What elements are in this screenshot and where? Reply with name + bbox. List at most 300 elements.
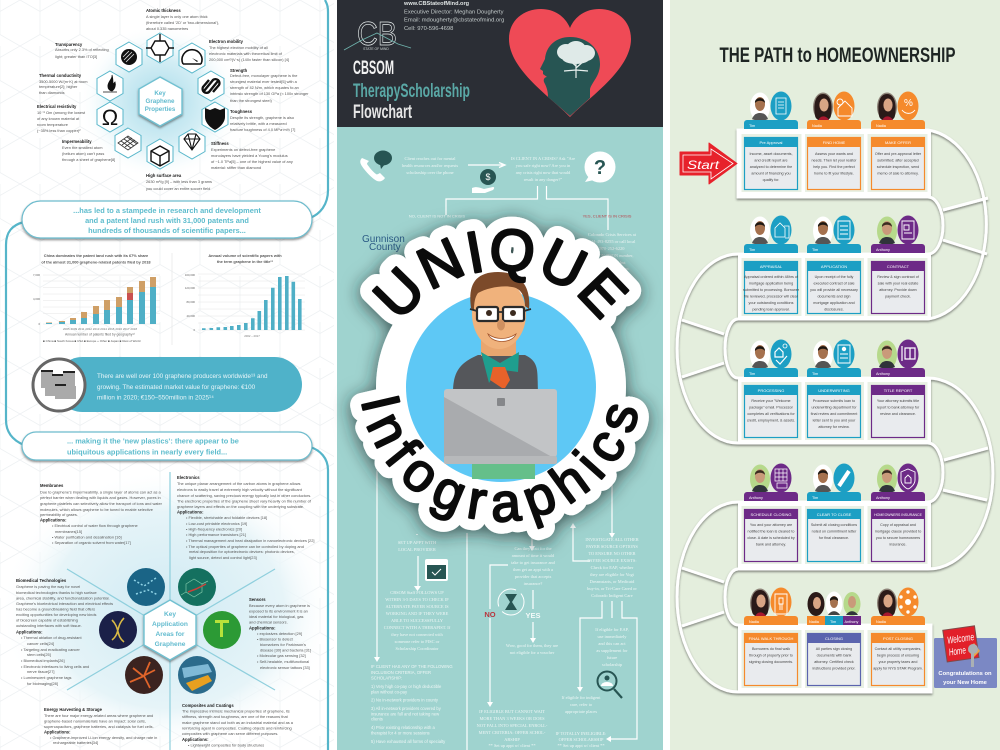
step: schedule closing: notified the loan is cleared to [748, 530, 794, 534]
step: make offer: submitted; after accepted [877, 158, 919, 162]
chart: annual scientific papers: 0 [193, 328, 195, 332]
text blocks: application areas: • Electrical control of water flow through graphene [52, 523, 138, 528]
step: title report: review and clearance. [880, 412, 916, 416]
step: pre approval: qualify for. [763, 178, 779, 182]
text: can they wait: then get an appt with a [513, 567, 553, 572]
text: is client in crisis: result in any danger?" [524, 177, 562, 182]
icon: question bubble: ? [594, 157, 606, 179]
text: criteria list: INCLUSION CRITERIA, OFFER [371, 670, 431, 675]
icon: start arrow: Start [687, 158, 720, 172]
chart: annual scientific papers: 160,000 [185, 273, 195, 277]
text blocks: graphene properties: Toughness [230, 109, 253, 114]
text blocks: application areas: Membranes [40, 483, 64, 488]
icon: heart with head and tree [509, 9, 631, 117]
text: eligible for EAP [595, 627, 629, 667]
arrowheads [374, 523, 615, 742]
properties hub [37, 8, 309, 191]
icon: start arrow [680, 143, 737, 184]
step: clear to close: for final clearance. [819, 536, 849, 540]
step: make offer: memo of sale to attorney. [877, 172, 919, 176]
chart: patents by geography: 2005 2009 2011 2012 2013 2014 2015 2016 2017 2018 [63, 327, 137, 331]
text blocks: application areas: Due to graphene's impermeability, a single layer of atoms can act as a [40, 490, 162, 494]
step: final walk through: Nadia [749, 620, 760, 624]
step: make offer: MAKE OFFER [885, 140, 911, 145]
step: find home: Assess your wants and [815, 152, 853, 156]
text blocks: graphene properties: (~35% less than copper)² [37, 128, 81, 133]
text: eligible for EAP: as supplement for [596, 648, 628, 653]
step: post closing: your property taxes and [879, 660, 917, 664]
application photo circles [99, 568, 241, 694]
panel: graphene infographic [0, 0, 334, 750]
text blocks: application areas: and chemical sensors. [249, 620, 288, 624]
text: staff follow up: ABLE TO SUCCESSFULLY [391, 618, 444, 623]
step: appraisal: mortgage application being [749, 282, 793, 286]
step: processing: Tim [749, 372, 755, 376]
contact details: Email: mdougherty@cbstateofmind.org [404, 18, 504, 24]
step: processing: Receive your "Welcome [751, 399, 791, 403]
text: is client in crisis: IS CLIENT IN A CRISIS? Ask "Are [511, 156, 575, 161]
text blocks: graphene properties: than the strongest steel) [230, 98, 272, 103]
text: criteria list: IF CLIENT HAS ANY OF THE FOLLOWING [371, 664, 453, 669]
text: investigate other payers: buy-in, or Tri-Care Cared or [587, 586, 637, 592]
step: find home: home to fit your lifestyle. [814, 172, 854, 176]
step: make offer: Nadia [876, 124, 887, 128]
text: eligible for indigent care: appropriate places [565, 709, 597, 714]
step: final walk through: FINAL WALK THROUGH [749, 636, 793, 641]
text blocks: graphene properties: (helium atom) can't pass [62, 151, 104, 156]
step: appraisal: your outstanding conditions [749, 301, 794, 305]
step: underwriting: underwriting department for [811, 406, 857, 410]
step: homeowners insurance: mortgage clause provided to [875, 530, 921, 534]
text blocks: graphene properties: room temperature [37, 122, 68, 127]
text: eligible offer scholarship: ARSHIP [504, 737, 520, 742]
text: criteria list: plan without co-pay [371, 690, 408, 694]
text blocks: application areas: supercapacitors, graphene batteries, and catalysis for fuel cells. [44, 724, 154, 729]
text: is client in crisis [511, 156, 575, 182]
text blocks: application areas: Electronics [177, 475, 200, 480]
callout: welcome home: Congratulations on [938, 671, 992, 677]
step: application: APPLICATION [821, 264, 847, 269]
arrow: to crisis question [468, 162, 505, 168]
icon: atomic lattice [146, 33, 174, 63]
text blocks: graphene properties: Transparency [55, 42, 83, 47]
text: can they wait: insurance? [524, 581, 542, 586]
step: closing: Tim [830, 620, 836, 624]
step: post closing: Nadia [876, 620, 887, 624]
step: title report: Your attorney submits title [877, 399, 919, 403]
icon: phone and speech bubble [360, 150, 392, 181]
step: find home [805, 92, 864, 192]
step: post closing [868, 588, 928, 688]
step: find home: help you. Find the perfect [813, 165, 855, 169]
text: crisis services: or NON-BSON number, [591, 253, 633, 259]
text: investigate other payers [585, 537, 639, 598]
banner: stampede in research: and a patent land rush with 31,000 patents and [85, 216, 249, 225]
text: criteria list: therapist for 4 or more sessions [371, 730, 430, 736]
hexagon: key graphene properties: Graphene [146, 98, 175, 105]
text blocks: graphene properties: strength of 42 N/m, which equates to an [230, 85, 299, 90]
text blocks: graphene properties: The highest electron mobility of all [209, 45, 268, 50]
icon: flame [97, 71, 123, 101]
step: final walk through: through of property prior to [749, 654, 793, 658]
sticker lettering: Infographics: Infographics [361, 396, 638, 530]
step: homeowners insurance: Anthony [876, 496, 890, 500]
hexagon: key application areas: Areas for [156, 631, 185, 638]
text blocks: application areas: • Biomedical implants[26] [21, 658, 65, 663]
text: staff follow up: CBSOM Staff FOLLOWS UP [390, 590, 444, 595]
text blocks: application areas: Composites and Coatings [182, 703, 234, 708]
callout: welcome home: Home [948, 645, 967, 659]
step: closing: documents with bank [817, 654, 851, 658]
text blocks: graphene properties: 10⁻⁸ Ωm (among the lowest [37, 110, 86, 115]
text: totally ineligible: IF TOTALLY INELIGIBLE: [556, 731, 606, 736]
label: no crisis: NO, CLIENT IS NOT IN CRISIS [409, 214, 465, 218]
step: pre approval [742, 92, 802, 192]
character avatar with laptop [406, 272, 596, 482]
text: eligible for EAP: use immediately [598, 634, 627, 639]
text blocks: application areas: membranes[15] [55, 529, 82, 534]
text blocks: application areas: has become a groundbreaking field that offers [16, 606, 95, 612]
text blocks: graphene properties: High surface area [146, 173, 182, 178]
flow: intake row [360, 150, 637, 271]
text blocks: application areas: graphene layers and effects on the coupling with the underlying substrate. [177, 504, 304, 509]
text blocks: application areas: composites with graphene can serve different purposes. [182, 731, 278, 736]
text: investigate other payers: TO ENSURE NO OTHER [588, 551, 636, 556]
text blocks: application areas: light source, detect and control light[23] [189, 555, 257, 560]
logo: CB mountains: STATE OF MIND [363, 47, 389, 51]
chart: annual scientific papers: 2002 – 2017 [244, 334, 260, 338]
text blocks: application areas: There are four major energy-related areas where graphene and [44, 713, 153, 718]
sticker white backing: Infographics [338, 382, 662, 556]
text: criteria list: 4) Prior existing relationship with a [371, 725, 435, 730]
heading: CBSOM Therapy Scholarship Flowchart: TherapyScholarship [353, 81, 470, 102]
text blocks: application areas: • Flexible, stretchable and foldable devices [18] [186, 515, 267, 520]
text blocks: application areas: Applications: [44, 730, 71, 734]
text blocks: application areas: permeability of gases. [40, 512, 78, 517]
text blocks: graphene properties: of ~1.0 TPa[5] – one of the highest value of any [211, 159, 293, 164]
text: staff follow up [384, 590, 451, 651]
text: eligible for EAP: If eligible for EAP, [595, 627, 629, 633]
logo: Gunnison County: County [369, 242, 401, 253]
text: set up appt: LOCAL PROVIDER [398, 547, 436, 552]
step: clear to close: Tim [812, 496, 818, 500]
text: eligible offer scholarship: NOT FALL INTO SPECIAL ENROLL- [477, 723, 548, 728]
step: application: Upon receipt of the fully [815, 275, 854, 279]
text blocks: application areas: stiffness, strength and toughness, are one of the reasons that [182, 714, 289, 719]
text blocks: application areas: Applications: [182, 737, 209, 742]
banner: new plastics [22, 432, 312, 460]
heading: CBSOM Therapy Scholarship Flowchart: CBSOM [353, 58, 394, 79]
step: make offer: schedule inspection, send [877, 165, 919, 169]
step: find home: FIND HOME [823, 140, 846, 145]
step: schedule closing: close. A date is scheduled by [747, 536, 795, 540]
text blocks: application areas: • Low-cost printable electronics [19] [186, 521, 247, 526]
step: underwriting: Tim [812, 372, 818, 376]
text blocks: application areas: • The optical properties of graphene can be controlled by doping and [186, 544, 304, 549]
text: staff follow up: someone refer to FISC or [395, 639, 440, 644]
text: client reaches out: Client reaches out for mental [405, 156, 456, 161]
step: underwriting: final review and commitment [811, 412, 857, 416]
step: pre approval: and credit report are [754, 158, 788, 162]
text: not eligible: Wow, good for them, they are [506, 643, 558, 649]
text: investigate other payers: INVESTIGATE ALL OTHER [585, 537, 639, 542]
text: criteria list: 3) All in-network providers covered by [371, 706, 442, 711]
step: pre approval: amount of financing you [751, 172, 791, 176]
text blocks: application areas: Because every atom in graphene is [249, 603, 310, 608]
text: criteria list: 5) Have exhausted all forms of specialty [371, 739, 446, 744]
step: homeowners insurance: Copy of appraisal and [880, 523, 916, 527]
step: processing: package" email. Processor [749, 406, 794, 410]
text blocks: graphene properties: Electrical resistivity [37, 104, 77, 109]
text blocks: application areas: • Thermal management and heat dissipation in nanoelectronic devices [22] [186, 538, 314, 543]
step: contract: Review & sign contract of [877, 275, 920, 279]
text blocks: application areas: electrons to easily travel at extremely high velocity without the significant [177, 487, 303, 492]
text blocks: graphene properties: monolayers have yielded a Young's modulus [211, 153, 288, 158]
banner: stampede in research: ...has led to a stampede in research and development [73, 206, 261, 215]
step: post closing: Contact all utility companies, [875, 647, 921, 651]
step: final walk through: signing closing documents. [749, 660, 793, 664]
step: post closing: apply for NYS STAR Program. [873, 666, 923, 670]
flow: lower section [371, 470, 639, 750]
text: can they wait [511, 546, 556, 586]
callout: graphene producers: growing. The estimated market value for graphene: €100 [97, 384, 256, 391]
text blocks: application areas [16, 475, 314, 748]
text blocks: graphene properties: Despite its strength, graphene is also [230, 115, 294, 120]
text blocks: graphene properties: relatively brittle, with a measured [230, 121, 287, 126]
text blocks: graphene properties: 200,000 cm²/(V·s) (140x faster than silicon) [4] [209, 57, 289, 62]
text: client reaches out: health resources and/or requests [402, 163, 458, 168]
text: eligible for EAP: scholarship [602, 662, 623, 667]
text: set up appt: SET UP APPT WITH [398, 540, 437, 545]
step: title report: TITLE REPORT [884, 388, 913, 393]
text: criteria list: SCHOLARSHIP: [371, 676, 402, 680]
text: investigate other payers: PAYER SOURCE OPTIONS [586, 544, 638, 549]
icon: dollar in hand: $ [485, 172, 491, 182]
text blocks: graphene properties: temperature[2]; higher [39, 84, 78, 89]
text: eligible offer scholarship: MORE THAN 3 WEEKS OR DOES [479, 716, 545, 721]
label: no: NO [484, 610, 496, 619]
step: contract: Anthony [876, 248, 890, 252]
chart: annual scientific papers: Annual volume of scientific papers with [208, 253, 282, 258]
chart: annual scientific papers: 80,000 [186, 300, 195, 304]
step: underwriting: Processor submits loan to [813, 399, 855, 403]
text blocks: application areas: graphene-based nanomaterials have an impact: solar cells, [44, 718, 146, 724]
hexagon: key graphene properties [139, 77, 182, 126]
text blocks: graphene properties: A single layer is only one atom thick [146, 14, 208, 19]
text blocks: application areas: cancer cells[24] [27, 641, 54, 646]
logo: CB mountains: CB [357, 15, 397, 52]
text: eligible for indigent care [562, 695, 601, 714]
icon: mesh [115, 128, 141, 158]
text blocks: application areas: Sensors [249, 597, 266, 602]
text blocks: application areas: • Luminescent graphene tags [21, 675, 72, 680]
text blocks: application areas: biomedical technologies thanks to high surface [16, 590, 97, 595]
header band [337, 0, 663, 127]
text: client reaches out: scholarship over the phone [406, 170, 454, 175]
step: application: executed contract of sale [814, 282, 854, 286]
text blocks: graphene properties [37, 8, 309, 191]
road row fills [738, 130, 931, 692]
callout: graphene producers: There are well over 100 graphene producers worldwide¹³ and [97, 373, 268, 380]
step: application: you will provide all necessary [810, 288, 858, 292]
text blocks: graphene properties: than diamonds [39, 90, 65, 95]
icon: magnifier [598, 672, 622, 698]
text: investigate other payers: Dreamstarts, or Medicaid [590, 579, 635, 585]
contact details: Cell: 970-596-4698 [404, 26, 453, 32]
callout: graphene producers: million in 2020; €150–550million in 2025¹⁴ [97, 394, 214, 402]
step: clear to close [805, 464, 864, 564]
step: title report [868, 340, 928, 440]
application spokes [67, 472, 275, 750]
text: is client in crisis: you safe right now? Are you in [516, 163, 571, 168]
step: closing: CLOSING [825, 636, 843, 641]
text: eligible for EAP: and this can act [598, 641, 626, 646]
text: not eligible: not eligible for a voucher [510, 650, 555, 655]
step: appraisal: file reviewed, processor will clear [744, 294, 799, 298]
step: appraisal: Appraisal ordered within 48hrs of [744, 275, 799, 279]
text: client reaches out [402, 156, 458, 175]
step: closing: attorney. Certified check [814, 660, 854, 664]
step: pre approval: Tim [749, 124, 755, 128]
icon: sample jars [41, 370, 76, 399]
logo: CB mountains [344, 15, 411, 52]
step: closing [805, 592, 864, 688]
panel: CBSOM therapy scholarship flowchart [337, 0, 663, 750]
text blocks: application areas: for bioimaging[28] [27, 681, 58, 686]
text blocks: application areas: biomarkers for Parkinson's [260, 642, 306, 647]
logo: Gunnison County [362, 234, 405, 253]
step: post closing: POST CLOSING [883, 636, 913, 641]
step: underwriting: letter sent to you and your [813, 418, 856, 422]
text blocks: application areas: area, chemical stability, and functionalization potential. [16, 596, 110, 600]
text: staff follow up: Scholarship Coordinator [395, 646, 439, 651]
sticker white backing: UNIQUE [348, 206, 653, 336]
step: make offer: % [904, 98, 913, 109]
text blocks: application areas: electronic sensor tattoos [33] [260, 665, 310, 670]
text blocks: graphene properties: strongest material ever tested[5] with a [230, 79, 298, 84]
text blocks: application areas: ideal material for biological, gas [249, 614, 304, 619]
icon: chain link [198, 71, 224, 101]
banner: new plastics: ubiquitous applications in nearly every field... [67, 448, 227, 456]
icon: gauge [179, 43, 205, 73]
text blocks: application areas: nerve tissue[27] [27, 669, 54, 674]
callout: welcome home: Welcome [947, 632, 975, 647]
chart: patents by geography: 7,000 [33, 273, 40, 277]
text blocks: graphene properties: intrinsic strength of 130 GPa (≈ 100x stronger [230, 91, 309, 96]
text blocks: application areas: disease [30] and bacteria [31] [260, 648, 311, 652]
text blocks: application areas: • Lightweight composites for body structures [188, 742, 264, 748]
text blocks: application areas: Energy Harvesting & Storage [44, 707, 103, 712]
text blocks: application areas: Graphene is paving the way for novel [16, 584, 80, 589]
text blocks: application areas: • High performance transistors [21] [186, 532, 246, 537]
text: investigate other payers: Check for EAP, whether [591, 565, 634, 571]
step: make offer: Offer and pre-approval letter [875, 152, 922, 156]
step: processing: PROCESSING [758, 388, 784, 393]
text blocks: application areas: exciting opportunities for developing new kinds [16, 612, 97, 617]
text blocks: graphene properties: Defect-free, monolayer graphene is the [230, 73, 297, 78]
banner: stampede in research: hundreds of thousands of scientific papers... [88, 226, 246, 235]
text: can they wait: amount of time it would [512, 553, 555, 558]
text blocks: application areas: The unique planar arrangement of the carbon atoms in graphene allows [177, 481, 301, 486]
hexagon: key graphene properties: Properties [145, 106, 176, 113]
step: contract: sale with your real estate [878, 282, 918, 286]
text blocks: application areas: • explosives detection [29] [257, 631, 302, 636]
step: contract: attorney. Provide down [879, 288, 917, 292]
hexagon: key application areas [144, 600, 196, 660]
text: criteria list: clients [371, 716, 383, 722]
callout: welcome home: your New Home [943, 680, 988, 686]
text blocks: graphene properties: Absorbs only 2.3% of reflecting [55, 47, 109, 52]
text blocks: application areas: Applications: [40, 518, 67, 522]
hexagon: key graphene properties: Key [154, 90, 166, 97]
heading: CBSOM Therapy Scholarship Flowchart [353, 58, 470, 123]
chart: patents by geography: ■ China ■ South Korea ■ USA ■ Europe + Other ■ Japan ■ Rest of World [43, 339, 141, 343]
text: investigate other payers: PAYER SOURCE EXISTS: [587, 558, 637, 563]
text blocks: application areas: Applications: [16, 630, 43, 634]
step: homeowners insurance [868, 464, 928, 564]
step: schedule closing [742, 464, 802, 564]
text blocks: application areas: The impressive intrinsic mechanical properties of graphene, its [182, 708, 290, 714]
text blocks: graphene properties: about 0.335 nanometres [146, 26, 188, 31]
contact details: www.CBStateofMind.org [403, 1, 470, 7]
step: contract: CONTRACT [887, 264, 910, 269]
sticker white backing [338, 206, 662, 556]
text blocks: graphene properties: Experiments on defect-free graphene [211, 147, 275, 152]
text blocks: application areas: • High-frequency electronics [20] [186, 526, 242, 532]
hexagon: key application areas: Key [164, 611, 176, 618]
step: schedule closing: bank and attorney. [756, 542, 786, 546]
step: clear to close: noted on commitment letter [812, 530, 857, 534]
text: criteria list [371, 664, 453, 744]
text blocks: application areas: molecules, which allows graphene to be tuned to enable selective [40, 507, 153, 512]
icon: omega [97, 102, 123, 132]
text: staff follow up: WITHIN 3-5 DAYS TO CHECK IF [385, 597, 449, 602]
step: pre approval: Income, asset documents, [749, 152, 793, 156]
step: pre approval: Pre Approval [760, 140, 783, 145]
text blocks: application areas: outstanding interfaces with soft tissue. [16, 623, 82, 628]
text: eligible offer scholarship: ** Set up appt w/ client ** [488, 743, 536, 748]
text blocks: graphene properties: material: stiffer than diamond [211, 165, 261, 170]
text blocks: application areas: • Self-healable, multifunctional [257, 659, 309, 664]
chart: patents by geography: 4,000 [33, 297, 40, 301]
text: totally ineligible [556, 731, 606, 748]
callout: welcome home [934, 626, 997, 688]
step: closing: All parties sign closing [816, 647, 852, 651]
text: criteria list: insurance are full and not taking new [371, 712, 440, 716]
chart: annual scientific papers: 40,000 [186, 314, 195, 318]
chart: annual scientific papers [172, 253, 305, 345]
icon: transparency disc [116, 42, 142, 72]
heading: CBSOM Therapy Scholarship Flowchart: Flowchart [353, 102, 412, 123]
text: crisis services: 970-252-6220 [600, 246, 625, 251]
contact details: Executive Director: Meghan Dougherty [404, 10, 504, 16]
step: closing: Nadia [809, 620, 820, 624]
connector line: section flow [6, 0, 328, 750]
step: appraisal: submitted to processing. Borrower [743, 288, 800, 292]
text: crisis services: 844-493-8255 or call local [589, 239, 636, 244]
text: can they wait: Can they wait for the [514, 546, 552, 551]
text blocks: application areas: stem cells[25] [27, 652, 51, 657]
step: homeowners insurance: insurance. [889, 542, 907, 546]
chart: annual scientific papers: the term graphene in the title¹¹ [217, 259, 274, 264]
chart: patents by geography: of the almost 31,000 graphene-related patents filed by 2018 [41, 260, 151, 264]
step: closing: Anthony [844, 620, 859, 624]
banner: stampede in research [22, 201, 312, 238]
step: underwriting: UNDERWRITING [818, 388, 850, 393]
text blocks: application areas: reinforcing agent in composites. Coating objects and reinforcing [182, 726, 292, 730]
text blocks: graphene properties: of any known material at [37, 116, 80, 121]
step: final walk through: Borrowers do final walk [752, 647, 790, 651]
